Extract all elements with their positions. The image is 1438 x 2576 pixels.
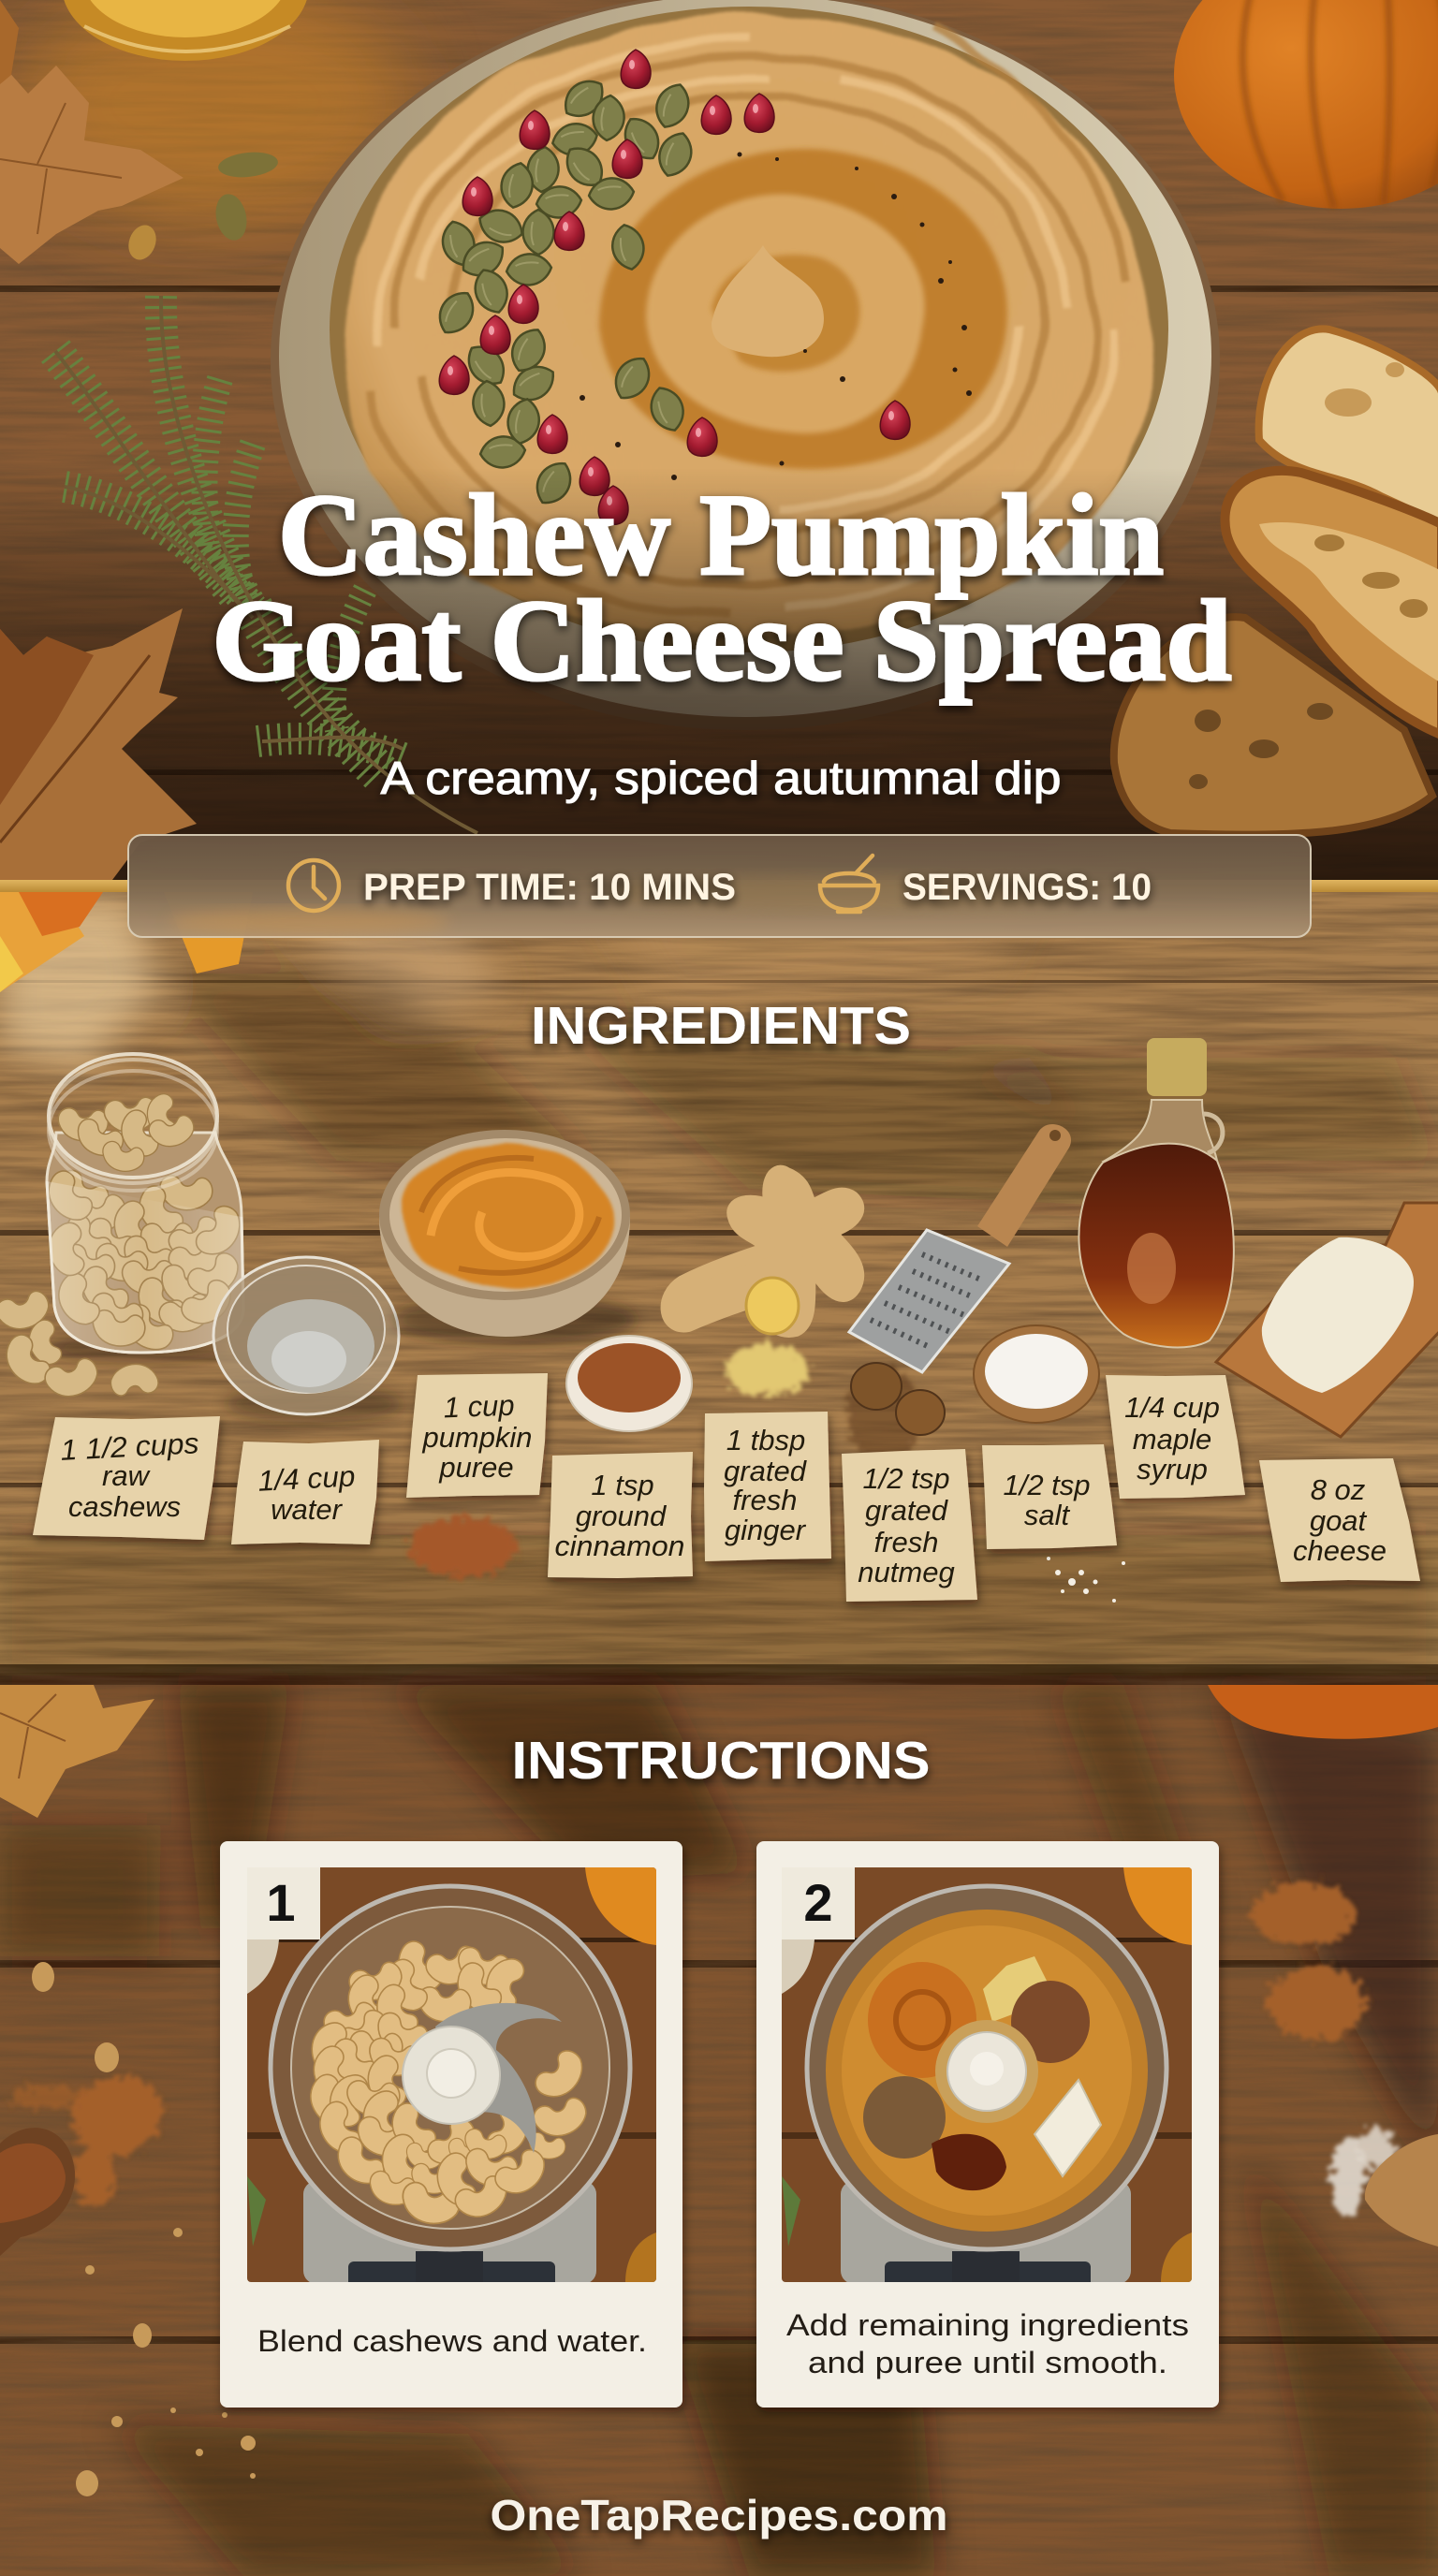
note: cashews: raw: [102, 1459, 152, 1492]
note: cashews: cashews: [68, 1490, 181, 1523]
pumpkin seeds on table: [124, 150, 279, 264]
note: water: 1/4 cup: [257, 1459, 356, 1498]
title: Cashew Pumpkin: [278, 471, 1164, 599]
step 2 photo: [782, 1867, 1192, 2290]
light and shadow: [19, 0, 412, 225]
step 1 number: [247, 1867, 320, 1939]
leaf top left: [0, 0, 183, 264]
note: water: water: [271, 1493, 344, 1526]
cashew jar: [38, 1054, 245, 1363]
note: ginger: grated: [724, 1455, 808, 1487]
grated ginger: [725, 1344, 809, 1397]
water bowl: [213, 1257, 403, 1423]
note: ginger: fresh: [733, 1484, 797, 1516]
ingredients heading: INGREDIENTS: [531, 996, 911, 1056]
grater: [849, 1124, 1071, 1372]
note: ginger: 1 tbsp: [726, 1424, 805, 1456]
step 2 number: [782, 1867, 855, 1939]
icon: clock: [288, 860, 339, 911]
prep time: PREP TIME: 10 MINS: [363, 867, 736, 908]
note: nutmeg: [842, 1449, 977, 1602]
servings: SERVINGS: 10: [902, 867, 1152, 908]
serving bowl: [271, 0, 1220, 730]
note: goat cheese: cheese: [1293, 1534, 1387, 1567]
planks: [0, 285, 1438, 2344]
loose cashews: [0, 1281, 161, 1406]
goat cheese on board: [1216, 1203, 1438, 1437]
note: cinnamon: cinnamon: [554, 1530, 685, 1562]
title: [212, 471, 1231, 705]
subtitle: A creamy, spiced autumnal dip: [380, 754, 1062, 804]
nutmeg: [847, 1363, 945, 1460]
note: maple syrup: [1106, 1375, 1245, 1499]
pumpkin puree bowl: [379, 1130, 637, 1344]
note: pumpkin puree: 1 cup: [443, 1389, 515, 1424]
bread slices: [1114, 329, 1438, 835]
cinnamon powder pile: [409, 1517, 518, 1577]
step 2 caption: and puree until smooth.: [808, 2346, 1167, 2379]
note: salt: 1/2 tsp: [1003, 1469, 1091, 1501]
salt dish: [974, 1325, 1099, 1423]
note: ginger: [704, 1412, 831, 1561]
spread body: [344, 13, 1153, 635]
dark gradient behind title: [0, 468, 1438, 886]
note: maple syrup: syrup: [1137, 1453, 1208, 1486]
card: step 1: [220, 1841, 682, 2408]
footer website: OneTapRecipes.com: [491, 2491, 947, 2539]
note: pumpkin puree: pumpkin: [422, 1421, 532, 1454]
pomegranate arils: [439, 50, 910, 524]
pumpkin seeds: [432, 72, 697, 510]
step 2 caption: Add remaining ingredients: [786, 2308, 1189, 2342]
honey glass: [62, 0, 309, 61]
step 2 number: 2: [803, 1873, 833, 1932]
note: pumpkin puree: puree: [438, 1451, 514, 1484]
ginger root: [668, 1173, 857, 1334]
step 1 photo: [247, 1867, 656, 2290]
cinnamon dish: [566, 1336, 692, 1431]
step 1 number: 1: [266, 1873, 296, 1932]
note: maple syrup: 1/4 cup: [1124, 1391, 1220, 1424]
note: salt: [982, 1444, 1117, 1549]
note: cinnamon: [548, 1452, 693, 1578]
pumpkin: [1174, 0, 1438, 209]
step 2 caption: [786, 2308, 1189, 2379]
instructions heading: INSTRUCTIONS: [511, 1731, 931, 1791]
sunlit leaves under the header: [0, 892, 253, 992]
maple syrup bottle: [1078, 1038, 1234, 1347]
spices right: [1252, 1882, 1366, 2041]
note: goat cheese: 8 oz: [1311, 1473, 1366, 1506]
note: nutmeg: fresh: [874, 1526, 938, 1559]
rosemary sprig: [55, 296, 477, 833]
note: nutmeg: nutmeg: [858, 1556, 955, 1588]
pumpkin top right of instructions: [1208, 1685, 1438, 1739]
scattered crumbs: [32, 1962, 256, 2496]
salt scatter: [1047, 1557, 1125, 1603]
note: pumpkin puree: [406, 1373, 548, 1498]
autumn leaf lower left: [0, 608, 197, 880]
note: ginger: ginger: [725, 1514, 807, 1546]
salt and nut right: [1331, 2128, 1438, 2247]
note: goat cheese: goat: [1310, 1504, 1368, 1537]
note: water: [231, 1440, 379, 1544]
note: goat cheese: [1259, 1458, 1420, 1582]
step 1 caption: Blend cashews and water.: [257, 2324, 647, 2358]
note: cashews: [33, 1416, 220, 1540]
note: salt: salt: [1024, 1499, 1071, 1531]
note: cinnamon: ground: [576, 1500, 668, 1532]
icon: bowl: [820, 856, 878, 912]
note: maple syrup: maple: [1133, 1423, 1211, 1456]
card: step 2: [756, 1841, 1219, 2408]
note: nutmeg: grated: [865, 1494, 949, 1527]
note: nutmeg: 1/2 tsp: [862, 1462, 950, 1495]
gold divider line: [0, 880, 1438, 892]
note: cinnamon: 1 tsp: [591, 1469, 654, 1501]
title: Goat Cheese Spread: [212, 577, 1231, 705]
pepper: [580, 152, 972, 480]
oil swirl: [599, 149, 1007, 469]
cinnamon and spoon left: [0, 2063, 172, 2256]
ingredient notes: [33, 1373, 1420, 1602]
note: cashews: 1 1/2 cups: [60, 1427, 199, 1467]
leaf top left of instructions: [0, 1685, 154, 1818]
info panel: [128, 835, 1311, 937]
